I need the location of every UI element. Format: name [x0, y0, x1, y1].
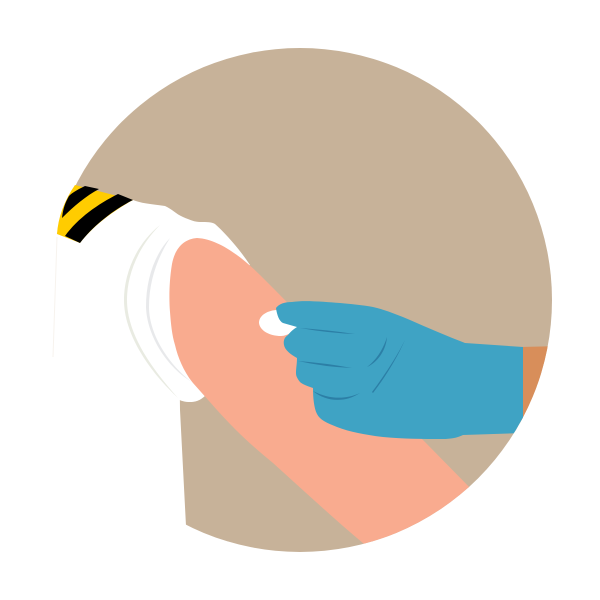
sleeve outer fold [124, 225, 178, 398]
black stripe top [62, 186, 99, 218]
crease: lower finger [313, 391, 360, 400]
arm [169, 238, 480, 560]
glove creases [298, 328, 405, 400]
sleeve cloth [54, 200, 250, 402]
crease: knuckle curve [367, 337, 387, 367]
gloved hand [276, 301, 523, 439]
crease: palm line [372, 340, 405, 393]
background circle [48, 48, 552, 552]
cotton wipe [259, 310, 298, 336]
sleeve inner fold [146, 238, 192, 382]
sleeve badge stripes [57, 185, 133, 243]
sleeve left edge [53, 237, 57, 357]
crease: middle finger [298, 361, 352, 368]
yellow band [57, 185, 133, 243]
orange wrist [520, 346, 548, 423]
illustration: gloved hand wiping an upper arm [52, 48, 552, 552]
black stripe bottom [65, 194, 133, 243]
shirt sleeve [53, 200, 250, 402]
body white cut-out at lower left [40, 234, 186, 560]
crease: upper finger [300, 328, 355, 334]
glove [276, 301, 523, 439]
